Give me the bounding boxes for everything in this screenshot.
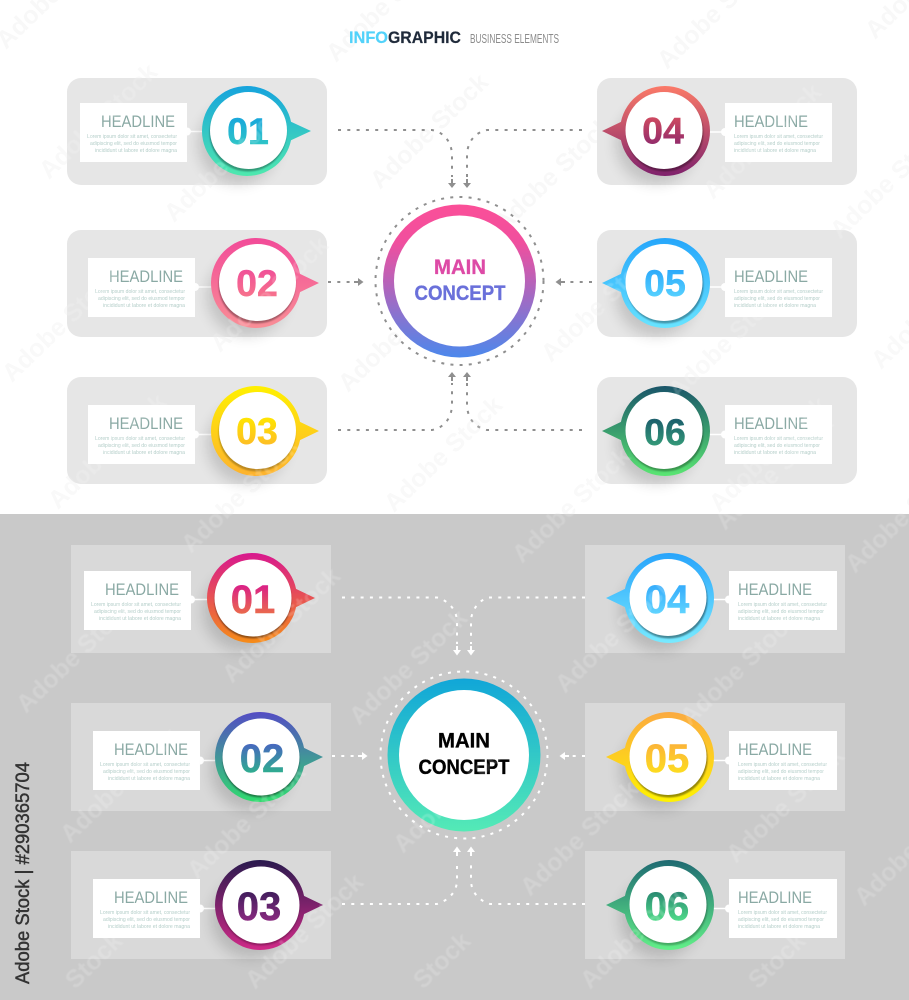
watermark on white area: Adobe Stock (333, 271, 462, 397)
watermark on white area (0, 0, 909, 578)
text block: bottom 05 (729, 731, 837, 790)
text block: top 05: adipiscing elit, sed do eiusmod tempor (734, 296, 820, 302)
text block: bottom 04: incididunt ut labore et dolore magna (738, 616, 820, 622)
text block: top 06 (725, 405, 832, 464)
text block: bottom 03: incididunt ut labore et dolore magna (108, 924, 190, 930)
watermark overlay: Adobe Stock (217, 562, 346, 688)
watermark overlay: Stock (408, 927, 476, 994)
text block: top 06: HEADLINE (734, 414, 808, 433)
title: GRAPHIC (388, 28, 461, 47)
panel: top 01 (67, 78, 327, 185)
panel: bottom 06 (585, 851, 845, 959)
panel: bottom 04 (585, 545, 845, 653)
watermark overlay: Adobe Stock (710, 409, 839, 535)
text block: top 03: incididunt ut labore et dolore magna (103, 450, 185, 456)
watermark overlay: Adobe Stock (379, 391, 508, 517)
text block: bottom 01: Lorem ipsum dolor sit amet, consectetur (91, 602, 181, 608)
lower grey section (0, 514, 909, 1000)
main concept: bottom: CONCEPT (418, 756, 510, 779)
panel: bottom 03 (71, 851, 331, 959)
text block: bottom 05: HEADLINE (738, 740, 812, 759)
text block: top 06: adipiscing elit, sed do eiusmod tempor (734, 443, 820, 449)
text block: top 02 (88, 258, 195, 317)
badge: top 04 (602, 86, 710, 184)
watermark overlay: Adobe Stock (34, 58, 163, 184)
badge: bottom 06: 06 (645, 885, 689, 929)
text block: bottom 02: incididunt ut labore et dolore magna (108, 776, 190, 782)
text block: bottom 03: Lorem ipsum dolor sit amet, consectetur (100, 910, 190, 916)
text block: bottom 06: incididunt ut labore et dolore magna (738, 924, 820, 930)
watermark on white area: Adobe Stock (698, 78, 827, 204)
watermark on white area: Adobe Stock (34, 58, 163, 184)
text block: top 05 (725, 258, 832, 317)
badge: top 06 (602, 386, 710, 484)
watermark on white area: Adobe Stock (507, 442, 636, 568)
page background (0, 0, 909, 514)
text block: top 02: HEADLINE (109, 267, 183, 286)
panel: top 05 (597, 230, 857, 337)
badge: bottom 06 (606, 860, 714, 958)
text block: bottom 01: adipiscing elit, sed do eiusmod tempor (94, 609, 181, 615)
watermark on white area: Adobe Stock (0, 261, 126, 387)
text block: top 04: adipiscing elit, sed do eiusmod tempor (734, 141, 820, 147)
text block: bottom 01: incididunt ut labore et dolore magna (99, 616, 181, 622)
panel: top 04 (597, 78, 857, 185)
panel: bottom 05 (585, 703, 845, 811)
watermark overlay: Adobe Stock (43, 388, 172, 514)
text block: top 02: Lorem ipsum dolor sit amet, consectetur (95, 289, 185, 295)
badge: top 05: 05 (644, 262, 686, 304)
text block: top 03 (88, 405, 195, 464)
text block: bottom 03: adipiscing elit, sed do eiusmod tempor (103, 917, 190, 923)
text block: bottom 02: HEADLINE (114, 740, 188, 759)
watermark overlay: Adobe Stock (205, 231, 334, 357)
badge: bottom 04: 04 (645, 578, 690, 622)
watermark overlay: Stock (60, 927, 128, 994)
main concept: top: CONCEPT (414, 282, 506, 305)
watermark overlay: Adobe Stock (11, 592, 140, 718)
watermark overlay: Adobe Stock (698, 78, 827, 204)
text block: top 03: adipiscing elit, sed do eiusmod tempor (98, 443, 185, 449)
badge: bottom 01 (203, 553, 315, 651)
text block: top 05: incididunt ut labore et dolore magna (734, 303, 816, 309)
badge: top 03: 03 (236, 410, 278, 452)
badge: bottom 03 (211, 860, 323, 958)
watermark overlay: Adobe Stock (176, 432, 305, 558)
text block: top 05: HEADLINE (734, 267, 808, 286)
badge: bottom 05: 05 (645, 737, 689, 781)
text block: top 04 (725, 103, 832, 162)
text block: bottom 06: HEADLINE (738, 888, 812, 907)
watermark on white area: Adobe Stock (43, 388, 172, 514)
text block: bottom 04: Lorem ipsum dolor sit amet, consectetur (738, 602, 827, 608)
text block: top 01: HEADLINE (101, 112, 175, 131)
watermark overlay: Adobe Stock (182, 758, 311, 884)
watermark overlay: Adobe Stock (704, 391, 833, 517)
watermark on white area: Adobe Stock (704, 391, 833, 517)
watermark overlay: Adobe Stock (515, 775, 644, 901)
watermark overlay: Adobe Stock (240, 868, 369, 994)
watermark overlay: Adobe Stock (507, 442, 636, 568)
text block: bottom 04: HEADLINE (738, 580, 812, 599)
title: INFO (349, 28, 388, 47)
text block: bottom 03 (93, 879, 200, 938)
badge: top 06: 06 (644, 411, 686, 453)
panel: top 03 (67, 377, 327, 484)
watermark overlay: Adobe Stock (0, 261, 126, 387)
text block: bottom 04: adipiscing elit, sed do eiusmod tempor (738, 609, 824, 615)
main concept: bottom: MAIN (438, 730, 490, 752)
watermark on white area: Adobe Stock (379, 391, 508, 517)
title (349, 28, 559, 47)
badge: bottom 03: 03 (237, 885, 281, 929)
text block: top 02: adipiscing elit, sed do eiusmod tempor (98, 296, 185, 302)
text block: top 01: adipiscing elit, sed do eiusmod tempor (90, 141, 177, 147)
text block: top 01: incididunt ut labore et dolore magna (95, 148, 177, 154)
badge: top 02 (207, 238, 319, 336)
badge: top 05 (602, 238, 710, 336)
text block: bottom 05: adipiscing elit, sed do eiusmod tempor (738, 769, 824, 775)
text block: bottom 03: HEADLINE (114, 888, 188, 907)
text block: top 04: Lorem ipsum dolor sit amet, consectetur (734, 134, 823, 140)
text block: top 03: HEADLINE (109, 414, 183, 433)
text block: top 03: Lorem ipsum dolor sit amet, consectetur (95, 436, 185, 442)
badge: top 02: 02 (236, 262, 278, 304)
watermark overlay: Adobe Stock (675, 605, 804, 731)
watermark overlay: Adobe Stock (55, 722, 184, 848)
watermark overlay: Adobe Stock (721, 742, 850, 868)
text block: bottom 06: adipiscing elit, sed do eiusmod tempor (738, 917, 824, 923)
stock id vertical text: Adobe Stock | #290365704 (13, 762, 34, 984)
text block: bottom 06 (729, 879, 837, 938)
watermark overlay: Stock (743, 927, 811, 994)
watermark on white area: Adobe Stock (205, 231, 334, 357)
text block: bottom 01 (84, 571, 191, 630)
text block: top 04: HEADLINE (734, 112, 808, 131)
watermark overlay: Adobe Stock (344, 604, 473, 730)
arrows: bottom connectors (332, 598, 585, 904)
watermark overlay: Adobe Stock (159, 101, 288, 227)
watermark overlay: Adobe Stock (536, 241, 665, 367)
text block: top 05: Lorem ipsum dolor sit amet, consectetur (734, 289, 823, 295)
text block: top 04: incididunt ut labore et dolore magna (734, 148, 816, 154)
main concept: top: MAIN (434, 256, 486, 279)
main concept: bottom (380, 672, 548, 838)
watermark overlay: Adobe Stock (663, 278, 792, 404)
text block: bottom 04 (729, 571, 837, 630)
badge: top 01: 01 (227, 110, 269, 152)
text block: bottom 02 (93, 731, 200, 790)
panel: bottom 01 (71, 545, 331, 653)
watermark overlay: Adobe Stock (388, 732, 517, 858)
text block: bottom 02: Lorem ipsum dolor sit amet, consectetur (100, 762, 190, 768)
watermark overlay: Adobe Stock (550, 572, 679, 698)
badge: bottom 05 (606, 712, 714, 810)
badge: bottom 01: 01 (231, 578, 275, 622)
text block: bottom 06: Lorem ipsum dolor sit amet, consectetur (738, 910, 827, 916)
watermark on white area: Adobe Stock (159, 101, 288, 227)
badge: top 03 (207, 386, 319, 484)
text block: top 06: incididunt ut labore et dolore magna (734, 450, 816, 456)
watermark on white area: Adobe Stock (663, 278, 792, 404)
text block: top 02: incididunt ut labore et dolore magna (103, 303, 185, 309)
text block: bottom 01: HEADLINE (105, 580, 179, 599)
watermark overlay: Adobe Stock (575, 868, 704, 994)
badge: bottom 02 (211, 712, 323, 810)
watermark on white area: Adobe Stock (176, 432, 305, 558)
panel: top 02 (67, 230, 327, 337)
text block: top 01 (80, 103, 187, 162)
watermark on white area: Adobe Stock (536, 241, 665, 367)
text block: top 06: Lorem ipsum dolor sit amet, consectetur (734, 436, 823, 442)
main concept: top (376, 197, 544, 365)
title: BUSINESS ELEMENTS (470, 32, 559, 46)
arrows: top connectors (328, 130, 592, 430)
badge: top 04: 04 (642, 110, 684, 152)
text block: bottom 02: adipiscing elit, sed do eiusmod tempor (103, 769, 190, 775)
panel: bottom 02 (71, 703, 331, 811)
text block: top 01: Lorem ipsum dolor sit amet, consectetur (87, 134, 177, 140)
panel: top 06 (597, 377, 857, 484)
watermark on white area: Adobe Stock (365, 68, 494, 194)
badge: bottom 02: 02 (240, 737, 284, 781)
watermark on white area: Adobe Stock (489, 111, 618, 237)
badge: top 01 (198, 86, 311, 184)
text block: bottom 05: incididunt ut labore et dolore magna (738, 776, 820, 782)
badge: bottom 04 (606, 553, 714, 651)
text block: bottom 05: Lorem ipsum dolor sit amet, consectetur (738, 762, 827, 768)
